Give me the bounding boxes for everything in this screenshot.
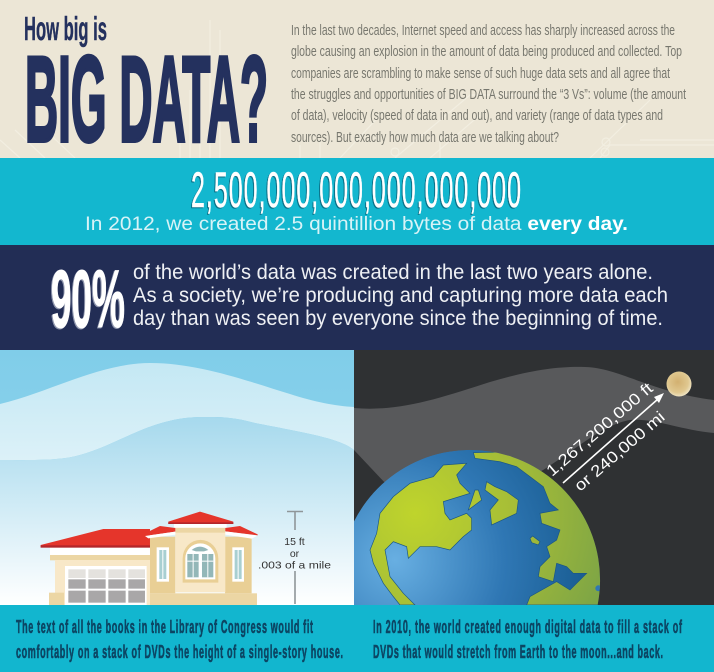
- panel: header: BIG DATA?: [25, 31, 268, 167]
- dimension: height marker: [258, 511, 331, 604]
- statement text: As a society, we’re producing and capturing more data each: [133, 284, 668, 307]
- panel: ninety percent: [0, 245, 714, 350]
- dimension: height marker: .003 of a mile: [258, 560, 331, 572]
- subtitle: In 2012, we created 2.5 quintillion bytes of data every day.: [85, 214, 628, 235]
- arrow: earth to moon: [563, 393, 664, 483]
- panel: earth and moon illustration: [354, 350, 714, 605]
- statement text: [133, 261, 668, 330]
- icon: house: [41, 512, 258, 605]
- text block: introduction: [291, 22, 687, 146]
- statement text: day than was seen by everyone since the beginning of time.: [133, 307, 663, 330]
- label: distance: 1,267,200,000 ft: [544, 380, 657, 480]
- caption: library of congress: comfortably on a stack of DVDs the height of a single-story house.: [16, 643, 343, 663]
- panel: daily data creation: [0, 158, 714, 245]
- panel: caption band: [0, 605, 714, 672]
- icon: moon: [666, 372, 692, 396]
- caption: library of congress: The text of all the books in the Library of Congress would fit: [16, 618, 313, 638]
- big number: 2,500,000,000,000,000,000: [191, 163, 521, 218]
- heading: how big is: How big is: [24, 10, 107, 47]
- caption: earth to moon: [373, 618, 682, 663]
- label: distance: or 240,000 mi: [572, 409, 669, 495]
- panel: house illustration: [0, 350, 354, 605]
- text block: introduction: sources). But exactly how much data are we talking about?: [291, 129, 559, 146]
- dimension: height marker: or: [290, 548, 300, 560]
- caption: earth to moon: DVDs that would stretch from Earth to the moon...and back.: [373, 643, 663, 663]
- caption: library of congress: [16, 618, 343, 663]
- label: distance: [547, 384, 665, 490]
- dimension: height marker: 15 ft: [284, 536, 305, 548]
- caption: earth to moon: In 2010, the world created enough digital data to fill a stack of: [373, 618, 682, 638]
- statement text: of the world’s data was created in the last two years alone.: [133, 261, 653, 284]
- icon: earth: [354, 450, 603, 605]
- panel: ninety percent: 90%: [51, 254, 125, 345]
